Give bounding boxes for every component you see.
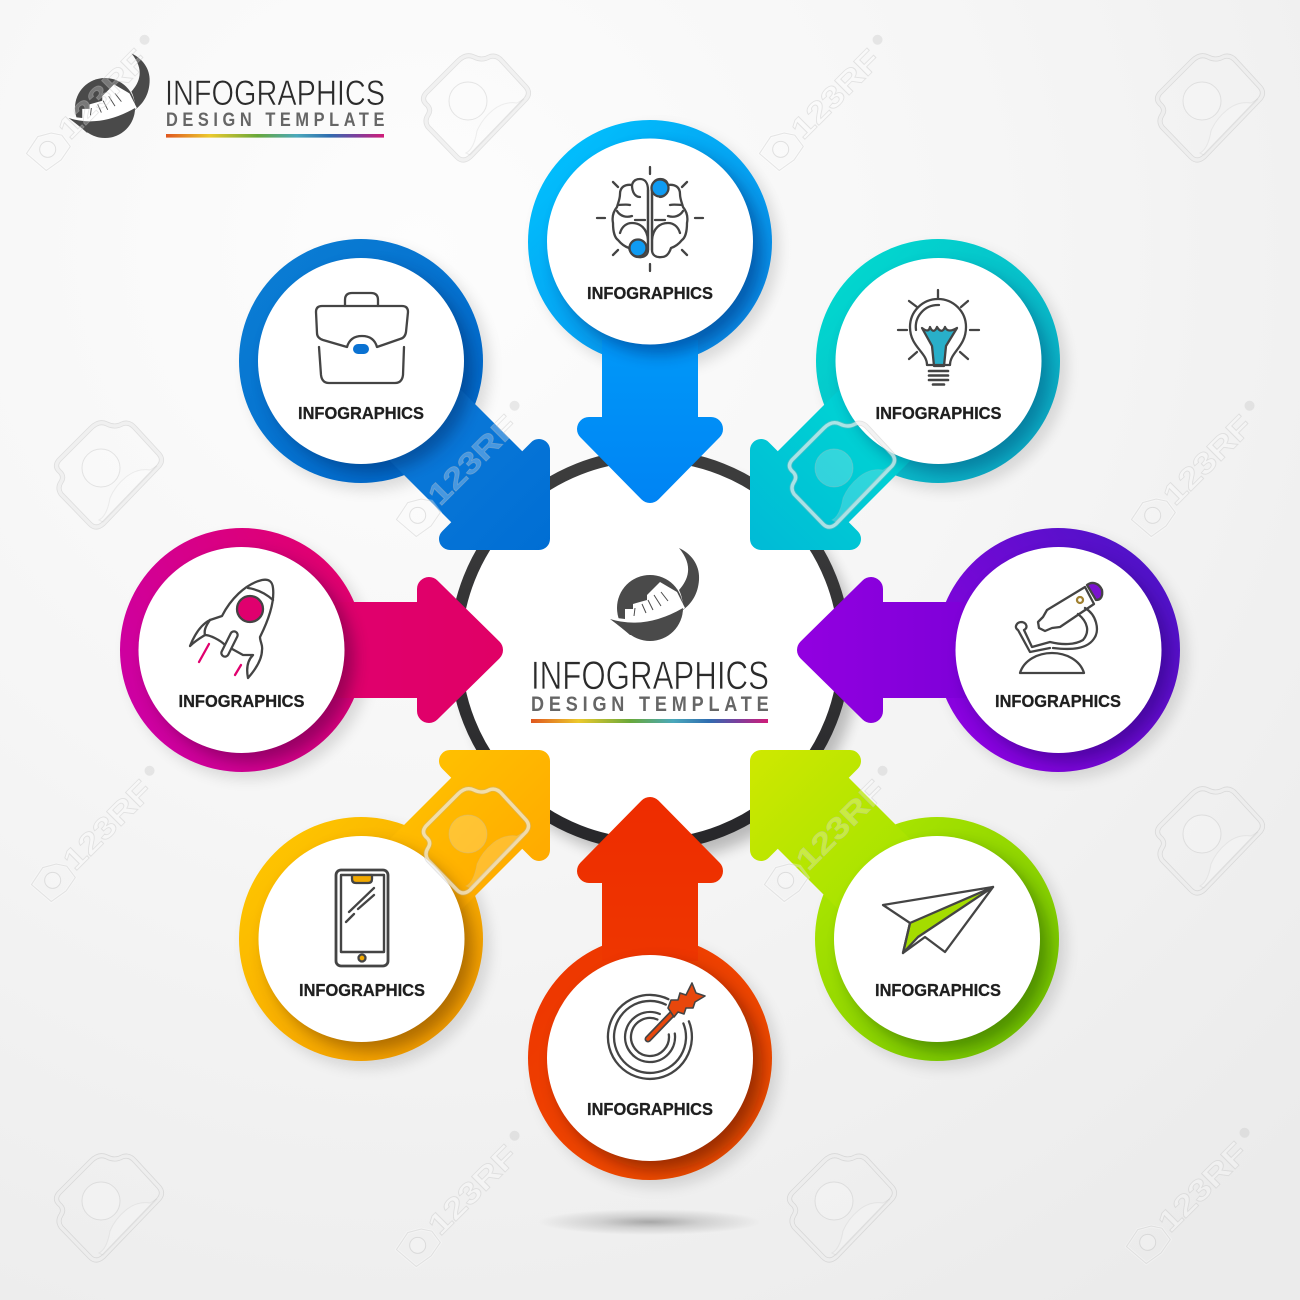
panel: top-left dark blue node xyxy=(239,239,539,539)
label: red: INFOGRAPHICS xyxy=(587,1099,713,1119)
inner shadow: teal xyxy=(844,267,1050,473)
panel: bottom-left yellow node xyxy=(239,761,539,1068)
panel: top-right teal node xyxy=(761,239,1067,539)
watermark stamps: 123RF xyxy=(422,1139,524,1242)
header rainbow bar xyxy=(166,134,384,138)
watermark stamps: 123RF xyxy=(52,43,154,146)
watermark stamps: 123RF xyxy=(57,774,159,877)
white disc: blue xyxy=(547,138,753,344)
central ring xyxy=(456,456,844,844)
icon: rocket xyxy=(190,580,273,678)
header logo xyxy=(67,53,385,138)
label: dark blue: INFOGRAPHICS xyxy=(298,403,424,423)
inner shadow: magenta xyxy=(148,556,354,762)
white disc: teal xyxy=(836,258,1042,464)
label: magenta: INFOGRAPHICS xyxy=(178,691,304,711)
center subtitle: DESIGN TEMPLATE xyxy=(531,693,769,716)
arrow and ring: blue xyxy=(528,120,779,491)
inner shadow: dark blue xyxy=(267,267,473,473)
icon: lightbulb xyxy=(898,290,979,384)
panel: top blue node xyxy=(528,120,779,491)
arrow and ring: purple xyxy=(809,528,1187,779)
icon: brain xyxy=(597,167,703,271)
ground shadow xyxy=(538,1209,762,1235)
label: yellow: INFOGRAPHICS xyxy=(299,980,425,1000)
panel: right purple node xyxy=(809,528,1187,779)
arrow and ring: red xyxy=(528,809,779,1187)
label: green: INFOGRAPHICS xyxy=(875,980,1001,1000)
watermark stamps: 123RF xyxy=(790,774,892,877)
inner shadow: green xyxy=(843,845,1049,1051)
white disc: red xyxy=(547,955,753,1161)
panel: bottom-right green node xyxy=(761,761,1066,1068)
label: purple: INFOGRAPHICS xyxy=(995,691,1121,711)
arrow and ring: magenta xyxy=(120,528,491,779)
white disc: purple xyxy=(956,547,1162,753)
watermark stamps: 123RF xyxy=(1157,409,1259,512)
icon: briefcase xyxy=(316,293,408,383)
arrow and ring: yellow xyxy=(239,761,539,1068)
center title: INFOGRAPHICS xyxy=(531,654,769,698)
icon: microscope xyxy=(1016,583,1102,673)
white disc: magenta xyxy=(138,547,344,753)
central circle xyxy=(456,456,858,860)
center logo xyxy=(531,548,769,723)
center logo mark xyxy=(608,548,699,641)
central circle shadow xyxy=(462,464,858,860)
icon: smartphone xyxy=(336,870,388,966)
arrow and ring: dark blue xyxy=(239,239,539,539)
center rainbow bar xyxy=(531,719,768,723)
inner shadow: red xyxy=(556,964,762,1170)
arrow and ring: teal xyxy=(761,239,1067,539)
watermark stamps: 123RF xyxy=(785,43,887,146)
watermark stamps: 123RF xyxy=(1152,1136,1254,1239)
header subtitle: DESIGN TEMPLATE xyxy=(166,109,384,130)
inner shadow: blue xyxy=(556,148,762,354)
label: teal: INFOGRAPHICS xyxy=(876,403,1002,423)
white disc: green xyxy=(834,836,1040,1042)
panel: bottom red node xyxy=(528,809,779,1187)
inner shadow: yellow xyxy=(267,845,473,1051)
white disc: yellow xyxy=(258,836,464,1042)
icon: paper plane xyxy=(883,887,993,953)
arrow and ring: green xyxy=(761,761,1066,1068)
panel: left magenta node xyxy=(120,528,491,779)
icon: target with arrow xyxy=(608,983,705,1079)
white disc: dark blue xyxy=(258,258,464,464)
header logo mark xyxy=(67,53,150,138)
label: blue: INFOGRAPHICS xyxy=(587,283,713,303)
watermark stamps: 123RF xyxy=(422,409,524,512)
header title: INFOGRAPHICS xyxy=(165,74,385,113)
inner shadow: purple xyxy=(964,556,1170,762)
